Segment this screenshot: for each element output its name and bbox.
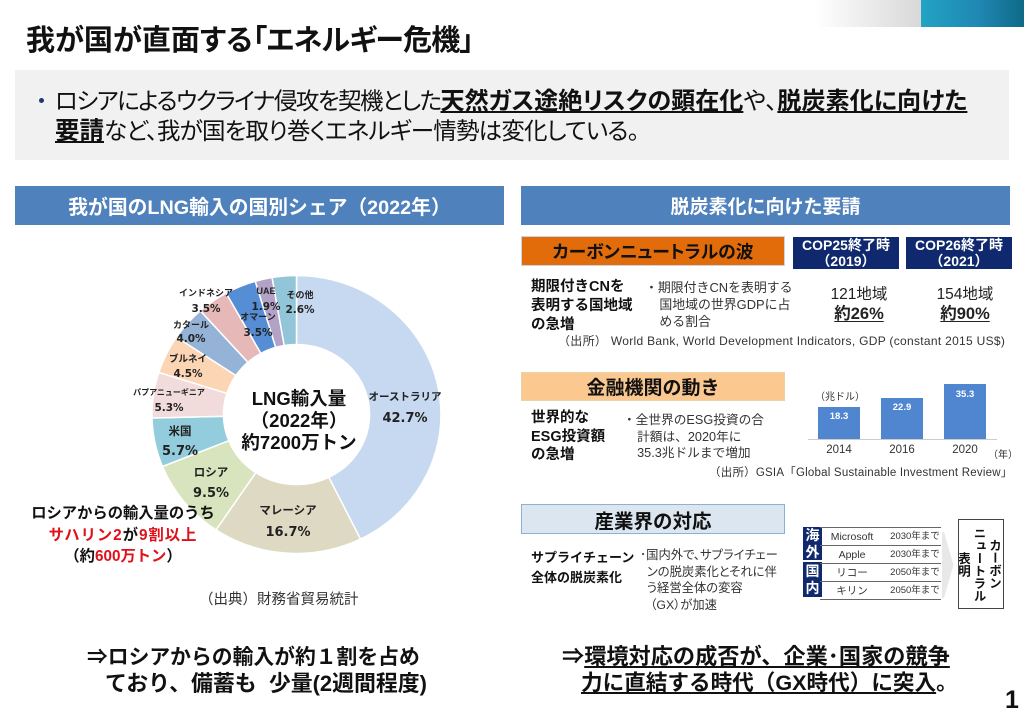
label: other: その他	[286, 289, 314, 300]
statement box: カーボン	[987, 539, 1001, 589]
bar 2014: 2014	[826, 444, 852, 456]
row: Ricoh: 2050年まで	[890, 567, 940, 578]
bar 2020: 35.3	[956, 389, 974, 400]
carbon neutral heading text	[531, 278, 632, 333]
ESG heading text	[531, 409, 605, 463]
label: UAE: UAE	[256, 286, 276, 296]
header: COP25	[793, 237, 899, 269]
supply chain description: ･国内外で、サプライチェー	[640, 548, 778, 562]
header: COP26: COP26終了時	[915, 237, 1003, 253]
conclusion: left	[87, 646, 427, 696]
label: Malaysia: マレーシア	[259, 504, 317, 517]
supply chain description	[640, 548, 778, 612]
segment: Qatar	[176, 311, 248, 376]
ESG description: 計額は、2020年に	[637, 430, 741, 444]
callout: Russia imports: ロシアからの輸入量のうち	[31, 505, 215, 522]
row: Kirin: キリン	[836, 585, 868, 597]
right panel heading	[521, 186, 1010, 225]
label: Indonesia: インドネシア	[179, 288, 233, 298]
domestic tag: 国	[806, 562, 820, 578]
label: Qatar: カタール	[173, 319, 209, 330]
value: COP26: 154地域	[937, 286, 993, 303]
arrow: chevron to statement	[942, 532, 954, 598]
label: Papua New Guinea: パプアニューギニア	[133, 388, 205, 397]
row: Apple: Apple	[839, 549, 865, 561]
segment: other	[272, 276, 296, 346]
left panel heading: 我が国のLNG輸入の国別シェア（2022年）	[68, 197, 451, 219]
header: COP25: COP25終了時	[802, 237, 890, 253]
donut centre label: 約7200万トン	[241, 432, 357, 453]
label: Papua New Guinea: 5.3%	[154, 402, 184, 414]
bar 2020: 2020	[952, 444, 978, 456]
bar 2014: 18.3	[830, 411, 848, 422]
segment: Oman	[226, 281, 276, 353]
domestic tag	[803, 562, 822, 597]
ESG heading text: の急増	[531, 447, 574, 463]
row: Microsoft	[820, 527, 941, 546]
donut chart: LNG import share	[133, 276, 442, 553]
overseas tag	[803, 527, 822, 560]
label: Russia: 9.5%	[193, 486, 229, 501]
supply chain heading text	[531, 550, 634, 585]
label: Russia: ロシア	[194, 466, 228, 479]
panel: summary	[15, 70, 1009, 160]
segment: Malaysia	[216, 473, 360, 553]
label: Brunei: ブルネイ	[169, 353, 207, 365]
value: COP25: 約26%	[834, 304, 884, 322]
section bar: carbon neutral wave	[521, 236, 785, 266]
header decoration teal block	[921, 0, 1024, 27]
table: company commitments	[803, 526, 941, 600]
section bar: industry response: 産業界の対応	[594, 510, 712, 532]
label: Brunei: 4.5%	[173, 368, 203, 380]
donut centre label: （2022年）	[251, 410, 347, 431]
supply chain description: ンの脱炭素化とそれに伴	[647, 565, 777, 579]
bar 2016: 2016	[889, 444, 915, 456]
callout: Russia imports: （約600万トン）	[64, 548, 182, 565]
statement box	[958, 519, 1004, 609]
carbon neutral description: ・期限付きCNを表明する	[645, 280, 793, 295]
value: COP26: 約90%	[940, 304, 990, 322]
value: COP26	[937, 286, 993, 322]
ESG description: 35.3兆ドルまで増加	[637, 446, 751, 460]
value: COP25	[831, 286, 887, 322]
section bar: financial institutions: 金融機関の動き	[586, 378, 720, 399]
page number: 1	[1005, 686, 1019, 714]
carbon neutral description: める割合	[659, 314, 711, 329]
title: 我が国が直面する「エネルギー危機」	[26, 25, 473, 57]
carbon neutral description: 国地域の世界GDPに占	[659, 297, 790, 312]
supply chain description: う経営全体の変容	[647, 581, 743, 595]
bar chart: ESG investment	[808, 384, 1018, 460]
supply chain heading text: 全体の脱炭素化	[531, 570, 622, 585]
ESG description: ・全世界のESG投資の合	[623, 413, 764, 427]
carbon neutral heading text: 期限付きCNを	[531, 279, 624, 295]
label: USA: 米国	[168, 424, 192, 438]
row: Kirin: 2050年まで	[890, 585, 940, 596]
bar 2016	[881, 398, 923, 456]
label: Australia: オーストラリア	[369, 391, 442, 403]
header decoration gradient	[815, 0, 921, 27]
section bar: carbon neutral wave: カーボンニュートラルの波	[552, 242, 754, 262]
conclusion: right	[562, 644, 958, 695]
callout: Russia imports	[31, 504, 215, 565]
donut centre label: LNG輸入量	[252, 388, 346, 409]
ESG heading text: 世界的な	[531, 410, 589, 426]
label: Malaysia: 16.7%	[265, 525, 311, 540]
conclusion left line 1: ⇒ロシアからの輸入が約１割を占め	[87, 646, 420, 669]
source: GSIA: （出所）GSIA「Global Sustainable Investment Review」	[709, 467, 1012, 479]
label: other: 2.6%	[285, 304, 315, 316]
carbon neutral heading text: の急増	[531, 317, 574, 333]
conclusion left line 2: ており、備蓄も 少量(2週間程度)	[105, 670, 427, 696]
segment: Papua New Guinea	[152, 372, 227, 418]
overseas tag: 海	[806, 526, 820, 542]
source: World Bank: （出所） World Bank, World Development Indicators, GDP (constant 2015 US$)	[558, 334, 1005, 348]
row: Apple: 2030年まで	[890, 549, 940, 560]
statement box: ニュートラル	[972, 526, 986, 602]
left panel heading	[15, 186, 504, 225]
label: Oman: 3.5%	[243, 327, 273, 339]
section bar: industry response	[521, 504, 785, 534]
ESG description	[623, 413, 764, 460]
segment: USA	[152, 416, 229, 466]
carbon neutral description	[645, 280, 793, 329]
bar 2014	[818, 407, 860, 456]
row: Kirin	[820, 581, 941, 600]
label: Indonesia: 3.5%	[191, 303, 221, 315]
supply chain description: （GX）が加速	[650, 598, 717, 612]
row: Microsoft: 2030年まで	[890, 531, 940, 542]
conclusion right line 2: 力に直結する時代（GX時代）に突入。	[581, 670, 958, 695]
unit label: （兆ドル）	[815, 391, 865, 403]
domestic tag: 内	[806, 580, 820, 596]
callout: Russia imports: サハリン2が9割以上	[49, 526, 197, 544]
value: COP25: 121地域	[831, 286, 887, 303]
conclusion right line 1: ⇒環境対応の成否が、企業･国家の競争	[562, 644, 950, 669]
header: COP25: （2019）	[816, 253, 876, 269]
segment: Australia	[296, 276, 441, 539]
row: Ricoh	[820, 563, 941, 581]
segment: Brunei	[159, 337, 236, 393]
segment: Indonesia	[200, 293, 261, 362]
row: Ricoh: リコー	[836, 567, 868, 579]
label: UAE: 1.9%	[251, 301, 281, 313]
label: Oman: オマーン	[240, 312, 276, 322]
statement box: 表明	[956, 552, 970, 576]
label: Qatar: 4.0%	[176, 333, 206, 345]
row: Microsoft: Microsoft	[831, 531, 873, 543]
supply chain heading text: サプライチェーン	[531, 550, 634, 565]
header: COP26: （2021）	[929, 253, 989, 269]
right panel heading: 脱炭素化に向けた要請	[670, 197, 860, 218]
segment: UAE	[255, 278, 284, 347]
bullet	[39, 98, 44, 103]
summary text line 1: ロシアによるウクライナ侵攻を契機とした天然ガス途絶リスクの顕在化や、脱炭素化に向けた	[55, 88, 967, 115]
bar 2020	[944, 384, 986, 456]
bar 2016: 22.9	[893, 402, 911, 413]
source: left chart: （出典）財務省貿易統計	[199, 592, 358, 608]
ESG heading text: ESG投資額	[531, 428, 605, 444]
section bar: financial institutions	[521, 372, 785, 401]
label: USA: 5.7%	[162, 444, 198, 459]
overseas tag: 外	[806, 544, 820, 560]
row: Apple	[820, 545, 941, 563]
carbon neutral heading text: 表明する国地域	[531, 298, 632, 314]
header: COP26	[906, 237, 1012, 269]
segment: Russia	[162, 441, 256, 530]
summary text line 2: 要請など、我が国を取り巻くエネルギー情勢は変化している。	[55, 118, 639, 145]
label: Australia: 42.7%	[382, 411, 428, 426]
